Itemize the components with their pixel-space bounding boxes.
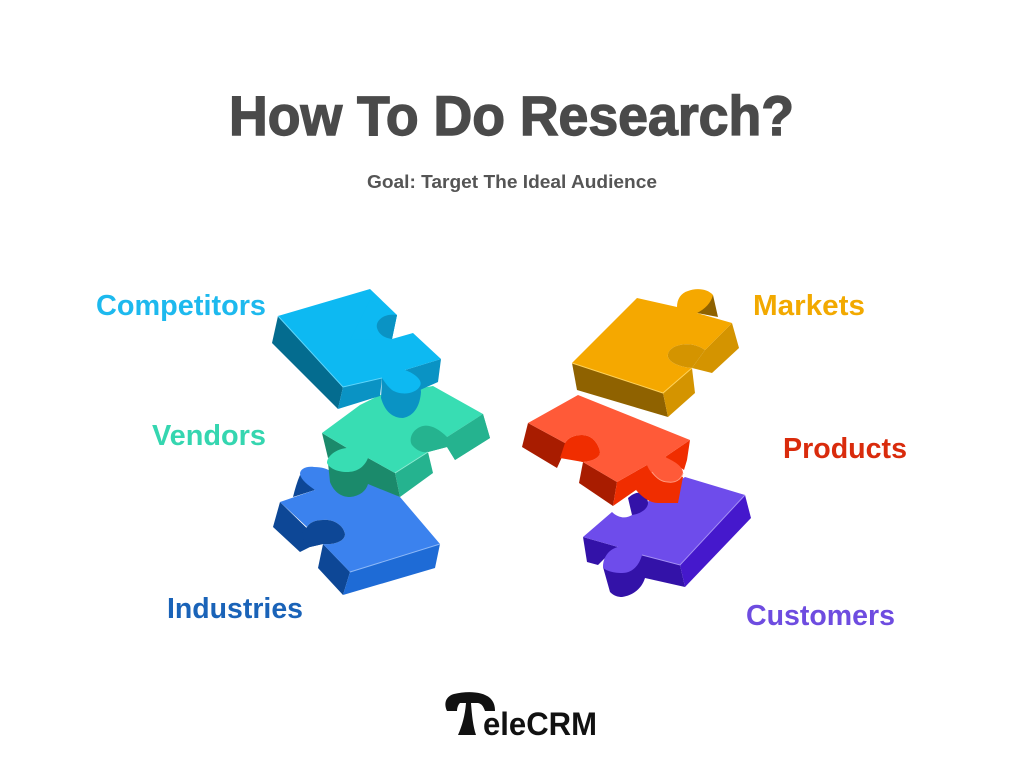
puzzle piece: markets (orange) — [572, 289, 739, 417]
logo wordmark: eleCRM — [483, 706, 597, 742]
subtitle: Goal: Target The Ideal Audience — [367, 172, 657, 192]
puzzle piece: products (red) — [522, 395, 690, 506]
puzzle piece: industries (dark blue) — [273, 467, 440, 595]
label: Customers: Customers — [746, 600, 895, 632]
logo icon: telephone T — [445, 692, 495, 735]
label: Vendors: Vendors — [152, 420, 266, 452]
puzzle piece: vendors (green) — [322, 386, 490, 497]
label: Markets: Markets — [753, 290, 865, 322]
logo: TeleCRM — [445, 692, 597, 742]
puzzle piece: customers (purple) — [583, 477, 751, 597]
label: Competitors: Competitors — [96, 290, 266, 322]
title: How To Do Research? — [229, 84, 794, 147]
label: Products: Products — [783, 433, 907, 465]
label: Industries: Industries — [167, 593, 303, 625]
puzzle piece: competitors (blue) — [272, 289, 441, 418]
